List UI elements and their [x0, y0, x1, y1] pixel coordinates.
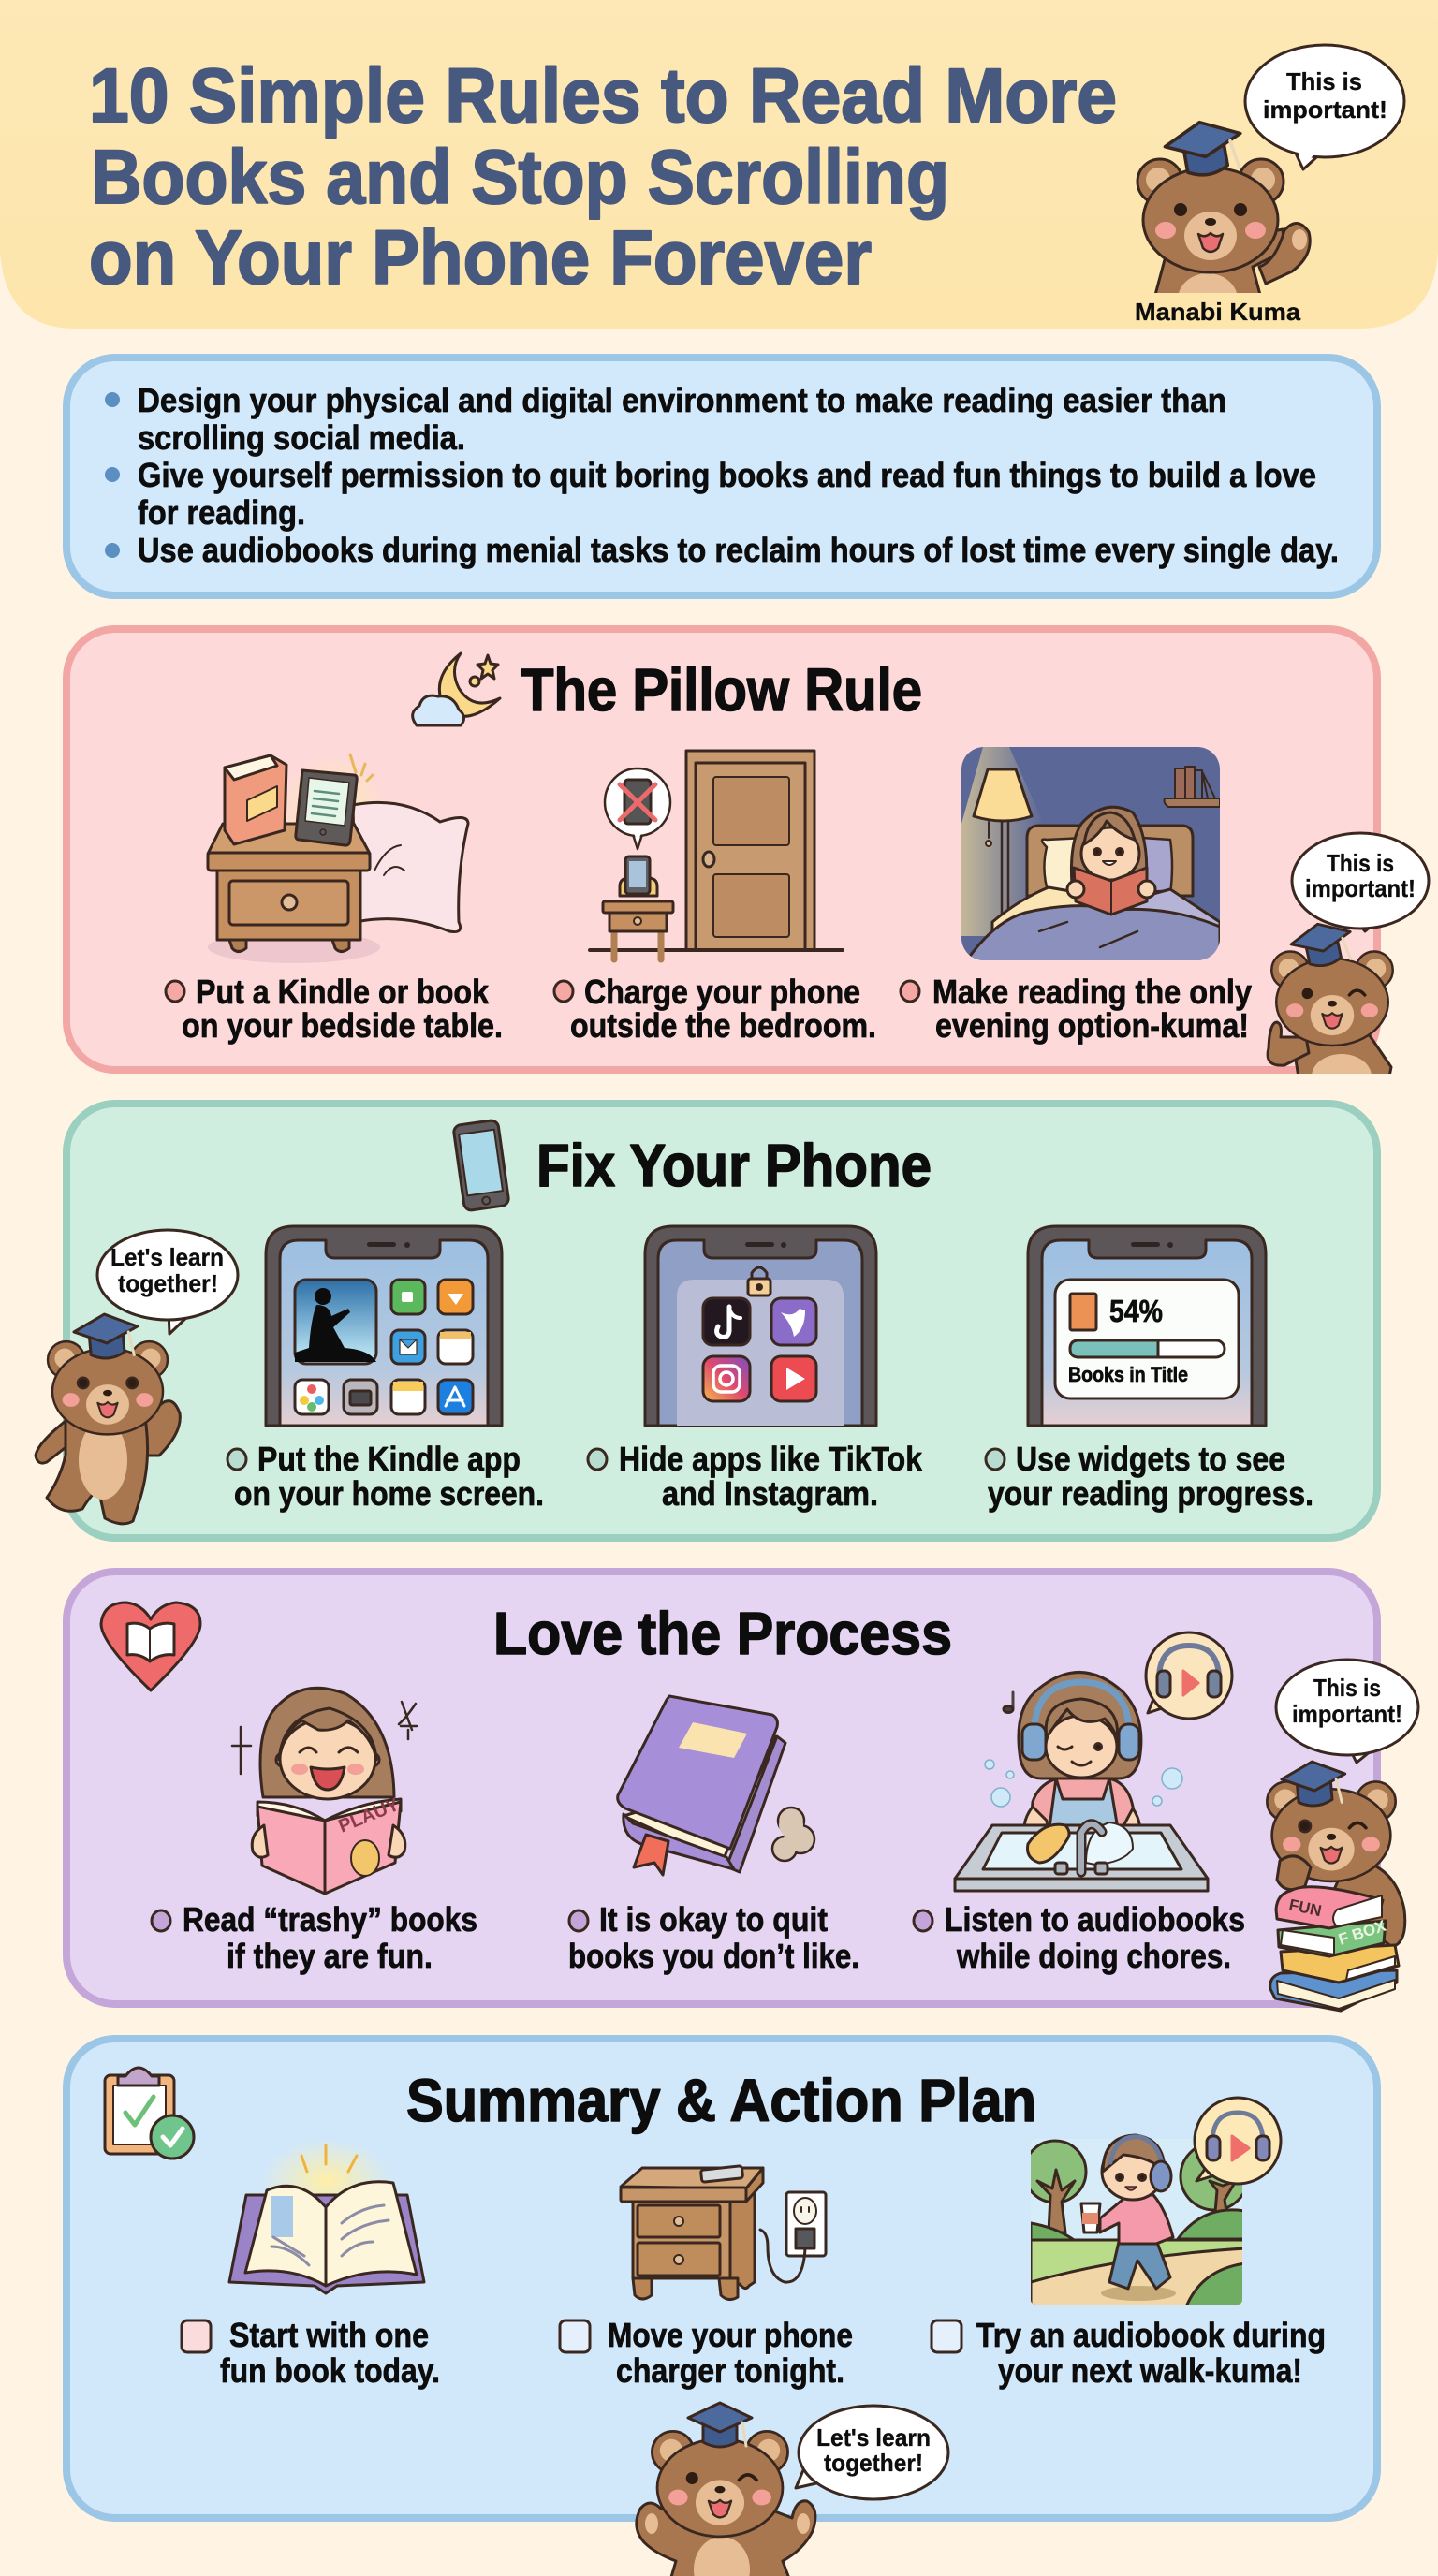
icon: clipboard with checks [105, 2068, 194, 2159]
illustration: nightstand with book, kindle and pillow [208, 754, 468, 963]
icon: padlock [748, 1267, 770, 1295]
widget card: Books in Title [1068, 1363, 1188, 1386]
heading: The Pillow Rule: The Pillow Rule [521, 656, 922, 724]
panel: summary and action plan [66, 2039, 1377, 2576]
speech bubble: this is important: important! [1263, 95, 1387, 124]
captions: pillow rule: Charge your phone [584, 973, 860, 1011]
captions: pillow rule: Make reading the only [932, 973, 1252, 1011]
captions: love the process: while doing chores. [956, 1937, 1231, 1975]
panel: key takeaways [66, 358, 1377, 595]
speech bubble: let's learn together [796, 2406, 948, 2499]
mascot: waving bear [1137, 120, 1312, 293]
illustration: walking with audiobook [1024, 2135, 1248, 2312]
mascot: dancing bear [36, 1311, 180, 1524]
captions: action checklist: Try an audiobook during [976, 2316, 1326, 2354]
bullet list [105, 381, 1339, 569]
speech bubble: this is important: important! [1305, 874, 1416, 902]
captions: action checklist: your next walk-kuma! [998, 2351, 1302, 2390]
captions: pillow rule: outside the bedroom. [570, 1006, 876, 1045]
illustration: closed purple book [618, 1696, 814, 1875]
app icons: home grid [295, 1280, 473, 1414]
captions: action checklist: Move your phone [608, 2316, 853, 2354]
speech bubble: this is important: This is [1286, 67, 1362, 95]
captions: love the process: Read “trashy” books [183, 1900, 477, 1939]
mascot: cheering bear [637, 2403, 815, 2576]
captions: fix your phone: Use widgets to see [1016, 1440, 1285, 1478]
captions: fix your phone: your reading progress. [988, 1474, 1313, 1513]
mascot: bear on book stack [1267, 1759, 1405, 2011]
heading: Summary & Action Plan: Summary & Action Plan [406, 2067, 1036, 2134]
captions: fix your phone: Put the Kindle app [257, 1440, 521, 1478]
widget card [1055, 1280, 1239, 1398]
captions: love the process: if they are fun. [227, 1937, 433, 1975]
title: Books and Stop Scrolling [91, 135, 949, 220]
captions: action checklist: fun book today. [220, 2351, 440, 2390]
bullet list: Design your physical and digital environment to make reading easier than [138, 381, 1226, 419]
icon: audiobook bubble [1195, 2098, 1281, 2184]
captions: love the process: Listen to audiobooks [945, 1900, 1245, 1939]
panel: fix your phone [36, 1104, 1377, 1538]
heading: Love the Process: Love the Process [493, 1600, 952, 1667]
icon: audiobook bubble [1146, 1632, 1232, 1719]
captions: love the process: books you don’t like. [568, 1937, 859, 1975]
app icons: tiktok, twitter, instagram, youtube [703, 1298, 816, 1401]
captions: love the process [152, 1900, 1245, 1975]
illustration: girl washing dishes with headphones [955, 1672, 1208, 1891]
bullet list: scrolling social media. [138, 418, 465, 457]
captions: fix your phone: and Instagram. [662, 1474, 878, 1513]
captions: fix your phone [227, 1440, 1313, 1513]
captions: love the process: It is okay to quit [599, 1900, 828, 1939]
captions: pillow rule: evening option-kuma! [935, 1006, 1249, 1045]
book stack [1270, 1887, 1399, 2011]
speech bubble: this is important [1292, 833, 1429, 931]
speech bubble: let's learn together: together! [824, 2449, 923, 2477]
captions: action checklist: charger tonight. [616, 2351, 844, 2390]
captions: pillow rule [166, 973, 1252, 1045]
captions: action checklist: Start with one [229, 2316, 429, 2354]
title: on Your Phone Forever [89, 215, 872, 300]
icon: tilted phone [453, 1120, 509, 1211]
speech bubble: this is important: important! [1292, 1700, 1402, 1728]
title: 10 Simple Rules to Read More [89, 53, 1117, 139]
panel: the pillow rule [66, 629, 1429, 1099]
bullet list: Use audiobooks during menial tasks to reclaim hours of lost time every single day. [138, 531, 1339, 569]
captions: pillow rule: on your bedside table. [182, 1006, 503, 1045]
widget card: 54% [1109, 1294, 1163, 1328]
icon: heart with book [101, 1603, 200, 1690]
bullet list: for reading. [138, 493, 305, 532]
speech bubble: let's learn together [97, 1230, 238, 1334]
illustration: girl reading in bed [961, 747, 1220, 964]
illustration: nightstand with phone charger [621, 2166, 826, 2300]
illustration: laughing girl with book [232, 1688, 417, 1894]
captions: fix your phone: Hide apps like TikTok [619, 1440, 923, 1478]
app icon: kindle [295, 1280, 376, 1364]
icon: moon and cloud [413, 653, 500, 725]
heading: Fix Your Phone: Fix Your Phone [536, 1132, 932, 1199]
speech bubble: let's learn together: Let's learn [110, 1243, 224, 1271]
panel: love the process [66, 1572, 1418, 2011]
captions: pillow rule: Put a Kindle or book [196, 973, 490, 1011]
phone: reading widget [1028, 1226, 1266, 1426]
speech bubble: let's learn together: together! [118, 1269, 218, 1297]
phone: hidden apps folder [645, 1226, 876, 1426]
illustration: open glowing book [229, 2139, 424, 2293]
header banner [0, 0, 1438, 329]
title [89, 53, 1117, 300]
book stack: FUN [1287, 1895, 1323, 1920]
speech bubble: let's learn together: Let's learn [816, 2423, 931, 2452]
speech bubble: this is important [1276, 1660, 1418, 1763]
mascot: thumbs-up bear [1266, 923, 1394, 1074]
book stack: F BOX [1336, 1916, 1388, 1949]
speech bubble: this is important [1245, 45, 1404, 169]
mascot name: Manabi Kuma [1135, 298, 1301, 326]
bullet list: Give yourself permission to quit boring books and read fun things to build a love [138, 456, 1316, 494]
illustration: laughing girl with book: PLAUY [336, 1794, 403, 1837]
phone: kindle home screen [266, 1226, 502, 1426]
speech bubble: this is important: This is [1313, 1674, 1381, 1702]
captions: action checklist [182, 2316, 1326, 2390]
illustration: phone charging outside the door [590, 751, 843, 959]
captions: fix your phone: on your home screen. [234, 1474, 544, 1513]
speech bubble: this is important: This is [1327, 849, 1394, 877]
